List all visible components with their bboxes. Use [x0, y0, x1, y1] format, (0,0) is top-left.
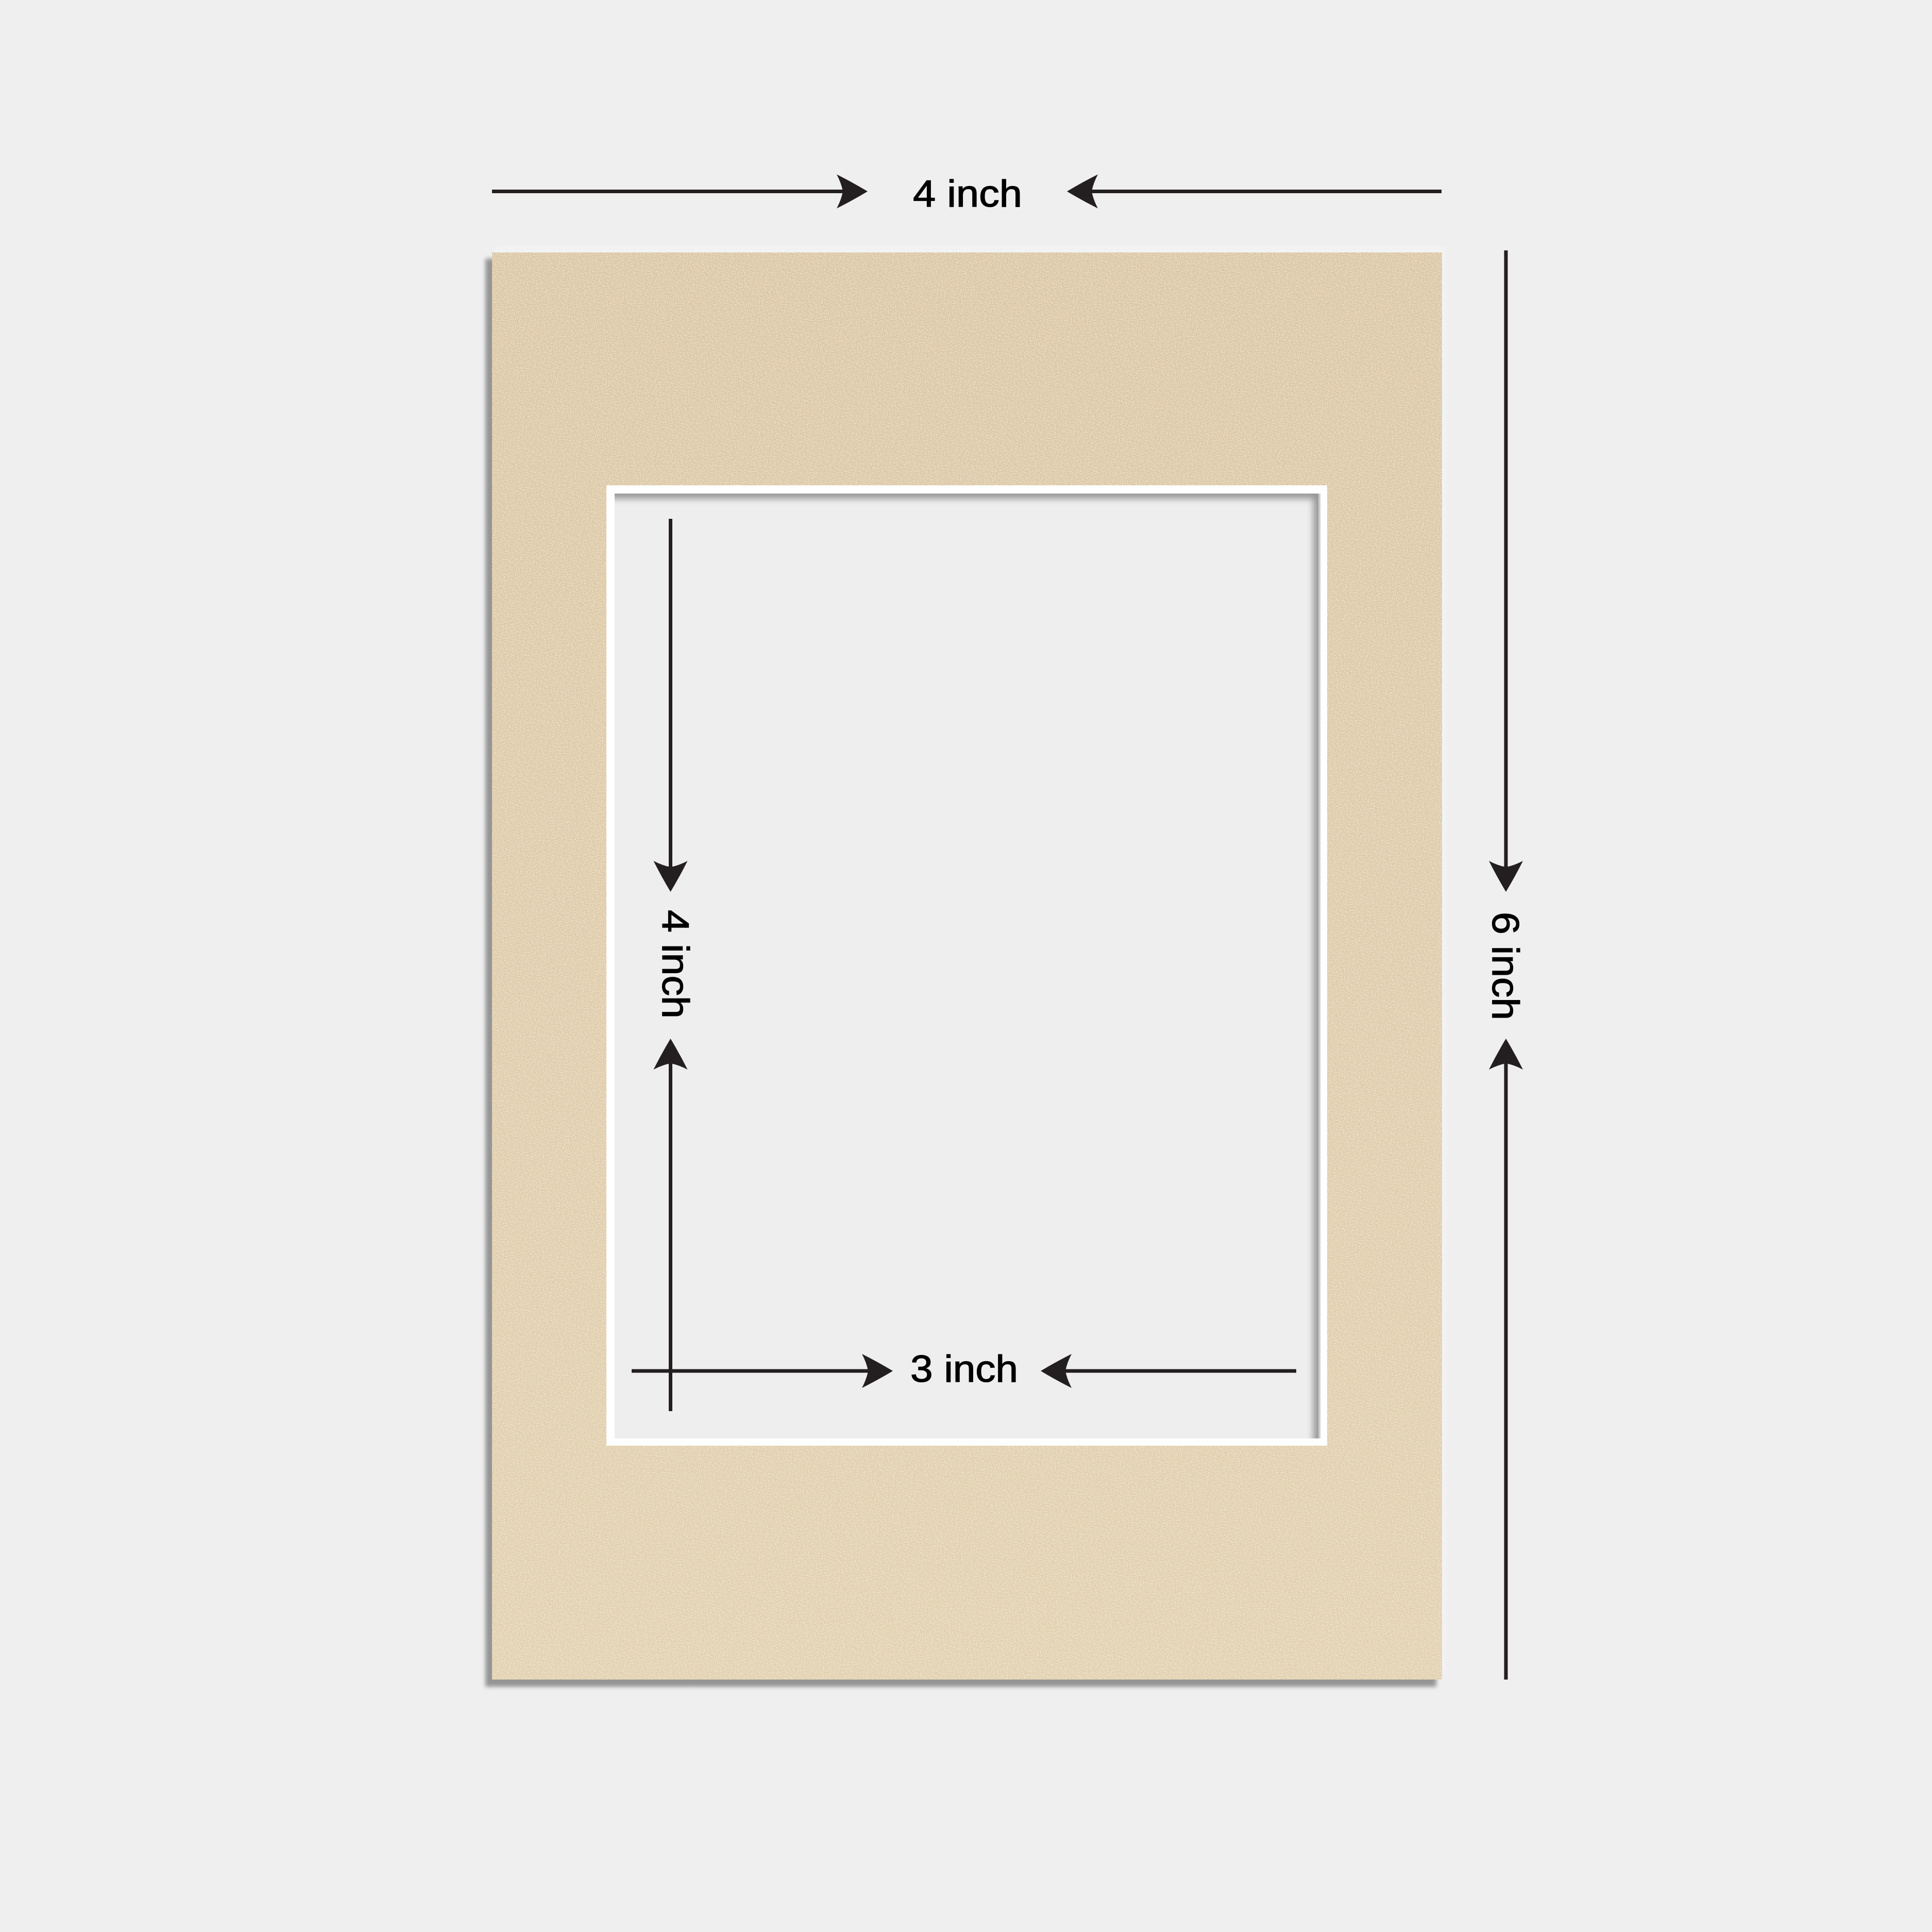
- dimension: window height 4 inch: [653, 519, 696, 1411]
- mat surface: [492, 252, 1442, 1680]
- arrow: top to bottom: [1489, 250, 1523, 892]
- window inner shadow: [615, 494, 1320, 1438]
- arrow: bottom to top: [653, 1039, 687, 1411]
- arrow: left to right: [492, 174, 868, 208]
- window opening: [615, 494, 1320, 1438]
- white bevel of window: [606, 485, 1327, 1446]
- arrow: bottom to top: [1489, 1039, 1523, 1680]
- arrow: right to left: [1067, 174, 1442, 208]
- dimension: outer width 4 inch: [492, 173, 1442, 215]
- mat light halo: [495, 246, 1445, 1673]
- infographic: mat board dimensions: [483, 174, 1523, 1689]
- arrow: right to left: [1041, 1354, 1296, 1388]
- mat board: [485, 246, 1445, 1687]
- mat paper texture: dark grain: [492, 252, 1442, 1680]
- label: 6 inch: 6 inch: [1484, 912, 1526, 1020]
- label: 3 inch: 3 inch: [910, 1348, 1018, 1390]
- mat paper texture: light grain: [492, 252, 1442, 1680]
- arrow: top to bottom: [653, 519, 687, 892]
- arrow: left to right: [632, 1354, 893, 1388]
- dimension: window width 3 inch: [632, 1348, 1296, 1390]
- label: 4 inch: 4 inch: [913, 173, 1022, 215]
- mat shadow: [485, 259, 1436, 1687]
- dimension: outer height 6 inch: [1484, 250, 1526, 1680]
- label: 4 inch: 4 inch: [654, 910, 696, 1019]
